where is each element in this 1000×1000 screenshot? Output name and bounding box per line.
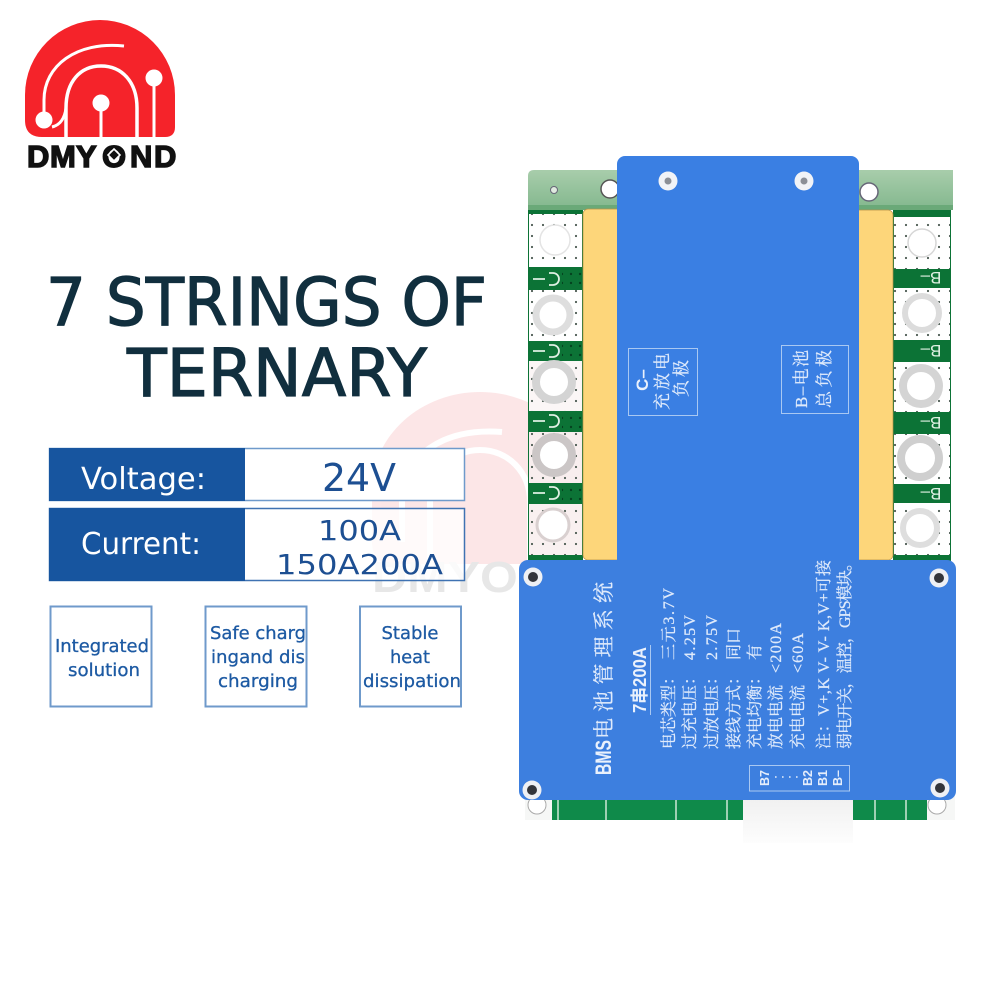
heading: 7 STRINGS OF (46, 264, 487, 341)
feature box: safe charging and discharging: charging (218, 671, 298, 692)
board specifications: 充电均衡： (746, 669, 764, 749)
heading: TERNARY (126, 335, 428, 412)
board specifications: 过充电压： (681, 669, 699, 749)
right terminal column: B– (920, 413, 941, 432)
right terminal column: B– (920, 484, 941, 503)
connector pin label (750, 766, 850, 791)
board specifications: 弱电开关，温控，GPS模块。 (835, 555, 854, 749)
board specifications: 同口 (725, 628, 743, 660)
spec row: current (49, 508, 464, 581)
right terminal column (893, 210, 951, 562)
board specifications: 过放电压： (703, 669, 721, 749)
board model: 7串200A (630, 647, 650, 713)
feature box: integrated solution: Integrated (55, 636, 149, 657)
connector pin label: B1 (816, 770, 830, 786)
spec row: voltage: Voltage: (81, 462, 206, 497)
spec row: voltage (49, 448, 464, 501)
logo wordmark: DMYOND (27, 139, 176, 174)
feature box: safe charging and discharging: ingand dis (211, 647, 305, 668)
board title: 电池管理系统 (592, 582, 616, 739)
board specifications: 2.75V (704, 615, 721, 660)
spec row: current: Current: (81, 527, 201, 562)
watermark logo (372, 392, 588, 602)
yellow insulation strips (583, 209, 893, 560)
label: B- battery total negative (782, 346, 848, 414)
label: C- charge discharge negative: C– (633, 369, 652, 391)
heading (46, 264, 487, 412)
spec row: current: 100A (318, 514, 401, 547)
board specifications: 电芯类型： (660, 669, 678, 749)
label: B- battery total negative: 总负极 (815, 350, 834, 408)
top mounting strip (528, 170, 953, 210)
right terminal column: B– (920, 341, 941, 360)
blue cover bottom section (519, 560, 956, 800)
BMS board (519, 156, 956, 843)
board specifications: 放电电流 (767, 685, 785, 749)
watermark logo: DMYOND (372, 553, 588, 602)
blue cover top section (617, 156, 859, 576)
board specifications: <60A (790, 633, 807, 673)
label: C- charge discharge negative: 充放电 (653, 353, 672, 410)
screws (522, 172, 950, 800)
feature box: safe charging and discharging (206, 606, 306, 706)
logo arch (25, 20, 175, 137)
board title: BMS (591, 740, 616, 775)
board specifications: 接线方式： (725, 669, 743, 749)
board specifications: 充电电流 (789, 685, 807, 749)
connector pin label: B2 (801, 770, 815, 786)
board specifications: 三元3.7V (660, 588, 678, 660)
board specifications: 有 (746, 644, 764, 660)
label: C- charge discharge negative (628, 348, 698, 416)
feature box: stable heat dissipation (360, 606, 461, 706)
feature box: stable heat dissipation: Stable (382, 623, 438, 644)
feature box: safe charging and discharging: Safe charg (210, 623, 306, 644)
feature box: integrated solution: solution (68, 660, 140, 681)
bottom edge: connector and green tabs (525, 795, 955, 843)
label: B- battery total negative: B–电池 (792, 350, 811, 408)
logo: DMYOND (25, 20, 176, 174)
connector pin label: B– (831, 770, 845, 786)
spec row: voltage: 24V (322, 456, 396, 500)
right terminal column: B– (920, 268, 941, 287)
board specifications: 4.25V (682, 615, 699, 660)
feature box: stable heat dissipation: heat (390, 647, 430, 668)
connector pin label: B7 (758, 770, 772, 786)
feature box: stable heat dissipation: dissipation (363, 671, 461, 692)
board specifications: <200A (768, 623, 785, 673)
board specifications: 注：V+,K V- V- K,V+可接 (815, 559, 833, 749)
spec row: current: 150A200A (276, 548, 443, 581)
feature box: integrated solution (50, 606, 152, 706)
board specifications (660, 555, 854, 749)
label: C- charge discharge negative: 负极 (672, 360, 691, 397)
left terminal column (528, 210, 583, 562)
